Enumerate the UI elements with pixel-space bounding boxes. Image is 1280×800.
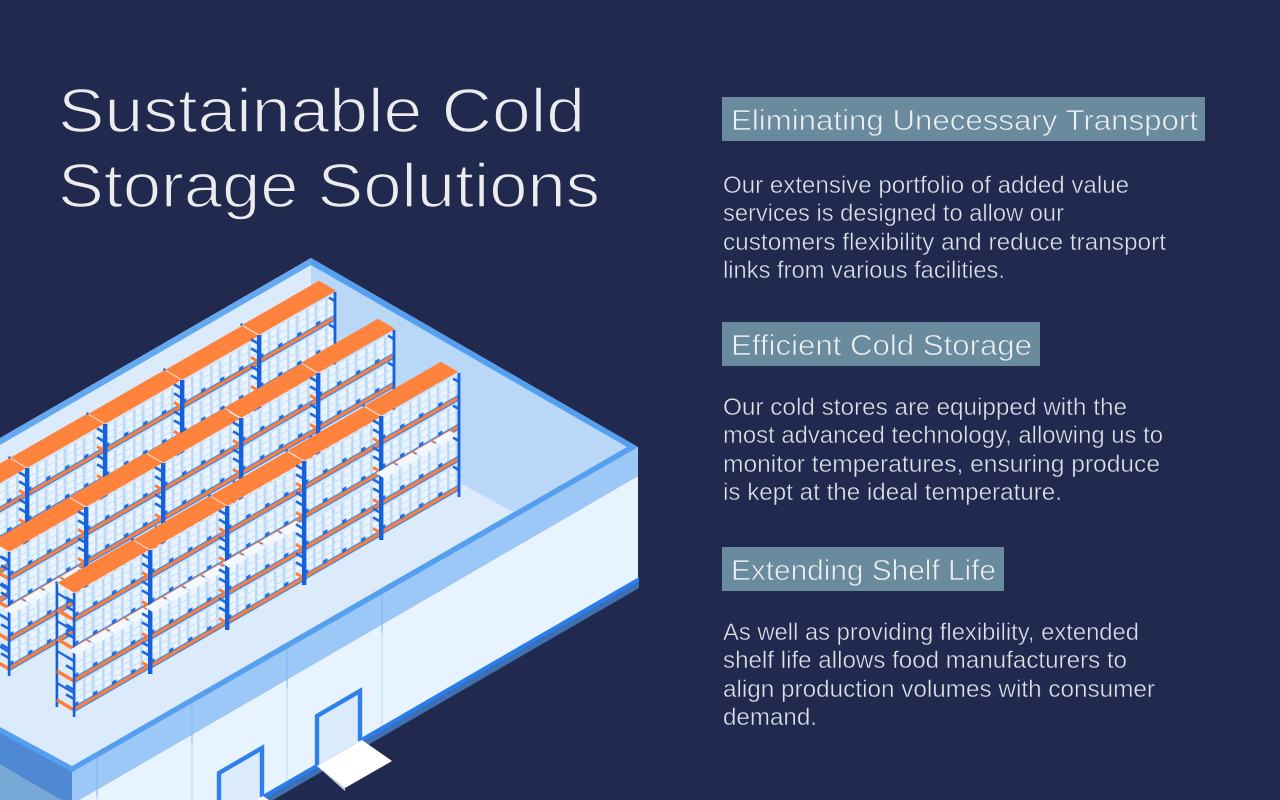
text block: transport: customers flexibility and reduce transport <box>723 229 1166 256</box>
shaded back wall and floor <box>311 265 627 512</box>
left wall lower face <box>0 764 62 800</box>
heading: extending shelf life <box>722 547 1004 591</box>
heading: eliminating unecessary transport <box>722 97 1205 141</box>
text block: cold storage <box>723 394 1163 506</box>
text block: transport: links from various facilities. <box>723 257 1005 284</box>
front rim <box>72 447 638 772</box>
back rim <box>0 258 311 445</box>
panel: extending shelf life <box>722 547 1155 731</box>
text block: transport: Our extensive portfolio of added value <box>723 172 1129 199</box>
left rim <box>0 727 72 772</box>
front wall upper band <box>72 447 638 800</box>
shelving row 1 <box>0 281 336 636</box>
right rim <box>311 258 638 447</box>
panel: eliminating unnecessary transport <box>722 97 1205 284</box>
title: Storage Solutions <box>58 152 600 221</box>
wall panel seams <box>97 594 382 800</box>
heading: efficient cold storage: Efficient Cold Storage <box>731 330 1032 362</box>
warehouse floor and back wall <box>0 258 638 772</box>
text block: transport <box>723 172 1166 284</box>
text block: cold storage: is kept at the ideal temperature. <box>723 479 1062 506</box>
title <box>58 77 600 221</box>
loading step right <box>317 740 392 791</box>
front wall base <box>254 577 639 800</box>
text block: shelf life: align production volumes with consumer <box>723 676 1155 703</box>
heading: extending shelf life: Extending Shelf Life <box>731 555 996 587</box>
title: Sustainable Cold <box>58 77 585 146</box>
front wall base shadow <box>263 582 639 800</box>
panel: efficient cold storage <box>722 322 1163 506</box>
loading step left <box>256 796 269 800</box>
heading: eliminating unecessary transport: Eliminating Unecessary Transport <box>731 105 1198 137</box>
left wall upper band <box>0 731 72 800</box>
heading: efficient cold storage <box>722 322 1040 366</box>
text block: cold storage: most advanced technology, allowing us to <box>723 422 1163 449</box>
text block: shelf life: demand. <box>723 704 817 731</box>
text block: cold storage: Our cold stores are equipped with the <box>723 394 1127 421</box>
front wall face <box>79 476 638 800</box>
text block: shelf life: As well as providing flexibility, extended <box>723 619 1139 646</box>
text block: shelf life <box>723 619 1155 731</box>
text block: cold storage: monitor temperatures, ensuring produce <box>723 451 1160 478</box>
door left <box>219 748 262 800</box>
shelving row 3 <box>55 362 460 717</box>
illustration: isometric cold storage warehouse <box>0 258 639 800</box>
shelving row 2 <box>0 319 395 676</box>
door right <box>317 691 360 766</box>
text block: shelf life: shelf life allows food manufacturers to <box>723 647 1127 674</box>
text block: transport: services is designed to allow our <box>723 200 1064 227</box>
